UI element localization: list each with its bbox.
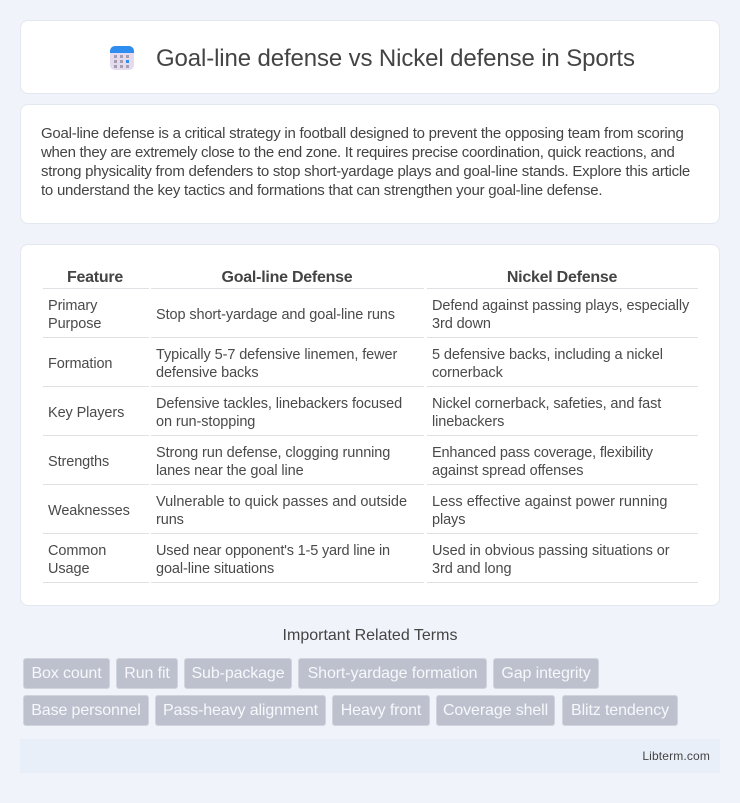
table header: Feature (67, 269, 123, 286)
row: weaknesses: plays (432, 512, 465, 528)
related terms tags: Short-yardage formation (308, 665, 477, 682)
row: weaknesses: Less effective against power running (432, 494, 667, 510)
row: primary purpose: Defend against passing plays, especially (432, 298, 689, 314)
intro text: Goal-line defense is a critical strategy in football designed to prevent the opposing team from scoring (41, 125, 684, 142)
intro text (41, 125, 690, 199)
row: key players: linebackers (432, 414, 504, 430)
row: formation: cornerback (432, 365, 503, 381)
related terms tags: Run fit (124, 665, 170, 682)
row: common usage: Usage (48, 561, 89, 577)
related terms tags: Gap integrity (501, 665, 591, 682)
row: common usage: goal-line situations (156, 561, 274, 577)
icon: calendar (110, 46, 134, 70)
row: common usage: Common (48, 543, 106, 559)
related terms tags: Heavy front (341, 702, 421, 719)
row: primary purpose: Primary (48, 298, 97, 314)
row: key players: Defensive tackles, linebackers focused (156, 396, 402, 412)
intro card (20, 104, 720, 224)
related terms tags: Base personnel (31, 702, 141, 719)
row: strengths (48, 445, 653, 479)
related terms tags (23, 658, 678, 726)
intro text: to understand the key tactics and formations that can strengthen your goal-line defense. (41, 182, 602, 199)
row: formation: 5 defensive backs, including a nickel (432, 347, 663, 363)
row: weaknesses: Weaknesses (48, 503, 130, 519)
comparison table panel (20, 244, 720, 606)
row: weaknesses: runs (156, 512, 184, 528)
row: weaknesses (48, 494, 667, 528)
row: common usage: Used near opponent's 1-5 yard line in (156, 543, 390, 559)
row: formation: Typically 5-7 defensive linemen, fewer (156, 347, 397, 363)
intro text: when they are extremely close to the end zone. It requires precise coordination, quick reactions, and (41, 144, 675, 161)
related terms tags: Blitz tendency (571, 702, 669, 719)
row: formation (48, 347, 663, 381)
row: weaknesses: Vulnerable to quick passes and outside (156, 494, 407, 510)
row: formation: defensive backs (156, 365, 258, 381)
row: key players: Nickel cornerback, safeties, and fast (432, 396, 661, 412)
row: strengths: against spread offenses (432, 463, 583, 479)
related terms tags: Pass-heavy alignment (163, 702, 318, 719)
related terms tags: Sub-package (192, 665, 284, 682)
related terms heading: Important Related Terms (283, 627, 457, 644)
intro text: strong physicality from defenders to stop short-yardage plays and goal-line stands. Explore this article (41, 163, 690, 180)
row: key players: on run-stopping (156, 414, 255, 430)
row: strengths: lanes near the goal line (156, 463, 304, 479)
row: common usage: 3rd and long (432, 561, 511, 577)
row: formation: Formation (48, 356, 112, 372)
row: primary purpose: Stop short-yardage and goal-line runs (156, 307, 395, 323)
header card (20, 20, 720, 94)
row: primary purpose: 3rd down (432, 316, 491, 332)
related terms tags: Box count (31, 665, 102, 682)
row: common usage (48, 543, 670, 577)
row: strengths: Strong run defense, clogging running (156, 445, 390, 461)
row: strengths: Strengths (48, 454, 109, 470)
row: primary purpose: Purpose (48, 316, 101, 332)
table header: Goal-line Defense (222, 269, 352, 286)
row: common usage: Used in obvious passing situations or (432, 543, 670, 559)
table header (67, 269, 617, 286)
title: Goal-line defense vs Nickel defense in Sports (156, 45, 635, 72)
related terms tags: Coverage shell (443, 702, 548, 719)
row: key players: Key Players (48, 405, 124, 421)
footer (20, 739, 720, 773)
footer credit: Libterm.com (642, 749, 710, 763)
row: strengths: Enhanced pass coverage, flexibility (432, 445, 653, 461)
row: key players (48, 396, 662, 430)
table header: Nickel Defense (507, 269, 617, 286)
row: primary purpose (48, 298, 690, 332)
